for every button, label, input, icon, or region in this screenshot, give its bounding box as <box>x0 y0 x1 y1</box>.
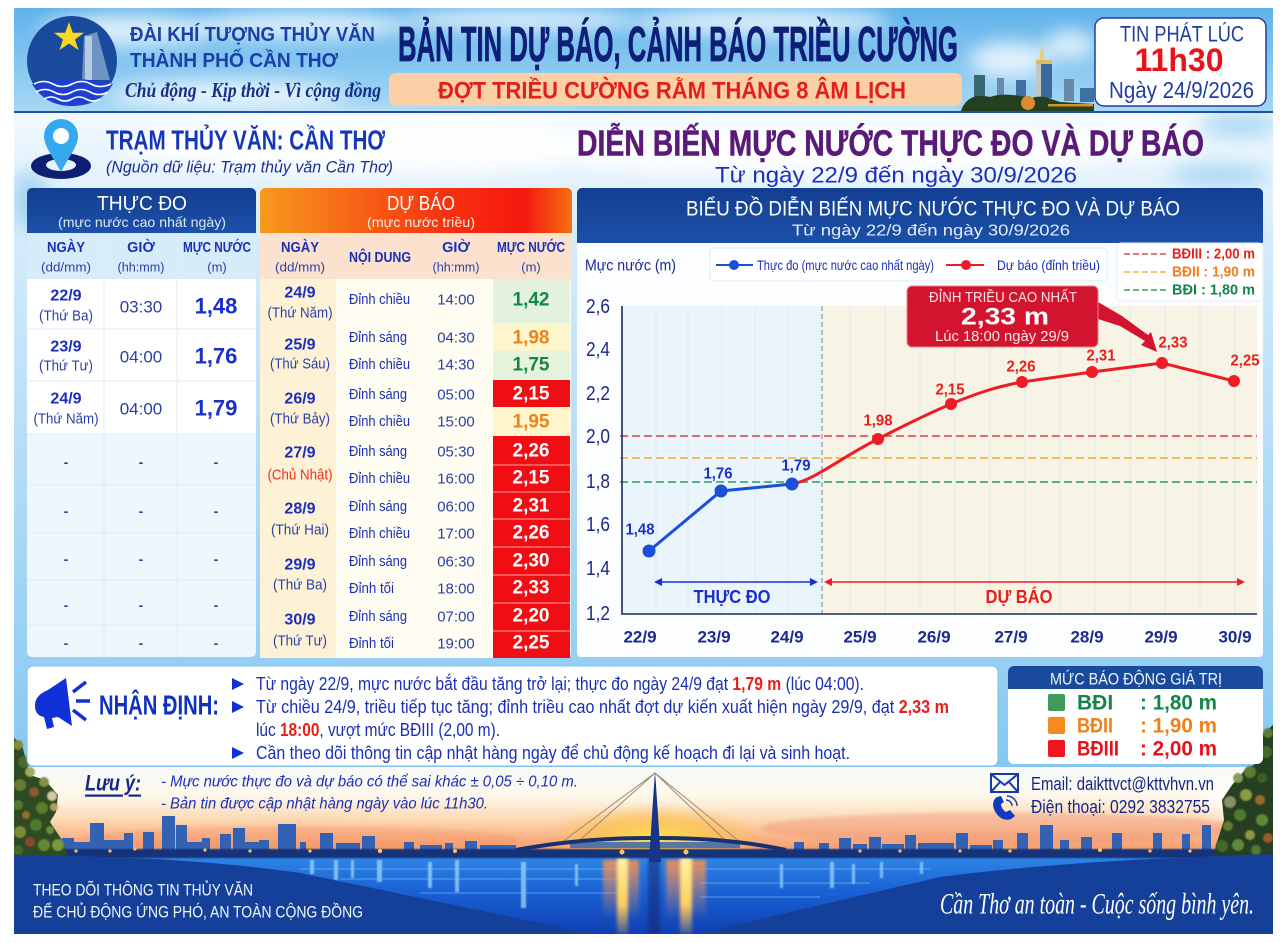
forecast rows <box>349 290 550 654</box>
issue time box: TIN PHÁT LÚC <box>1120 22 1244 46</box>
water <box>115 857 1192 934</box>
measured column headings: (hh:mm) <box>118 260 164 274</box>
forecast value cells <box>493 279 570 658</box>
panel: alert values: : 1,90 m <box>1140 714 1217 738</box>
series legend <box>710 248 1107 281</box>
forecast rows: Đỉnh chiều <box>349 471 410 487</box>
measured rows: (Thứ Năm) <box>34 410 99 428</box>
forecast rows: 1,98 <box>513 328 549 348</box>
arrow: forecast range <box>824 578 1245 607</box>
forecast rows: 2,20 <box>513 606 549 626</box>
panel: alert values: BĐI <box>1077 692 1113 714</box>
arrow: measured range: THỰC ĐO <box>694 587 770 607</box>
measured rows: - <box>139 454 144 470</box>
main body background <box>12 113 1280 767</box>
x-axis labels <box>623 628 1252 646</box>
forecast rows: 1,95 <box>513 412 550 432</box>
forecast rows: 06:00 <box>437 498 475 516</box>
forecast column headings: (m) <box>521 260 541 274</box>
city skyline <box>50 816 1230 858</box>
alert level legend: BĐIII : 2,00 m <box>1172 246 1255 262</box>
series legend: Thực đo (mực nước cao nhất ngày) <box>757 257 934 273</box>
footer message: ĐỂ CHỦ ĐỘNG ỨNG PHÓ, AN TOÀN CỘNG ĐỒNG <box>33 902 363 922</box>
y-axis labels: 2,4 <box>586 339 610 361</box>
measured rows: - <box>214 597 219 613</box>
measured rows: - <box>64 551 69 567</box>
forecast rows: 2,26 <box>513 522 549 544</box>
forecast column headings: MỰC NƯỚC <box>497 238 565 256</box>
forecast column headings: (hh:mm) <box>432 260 480 274</box>
measured rows: 24/9 <box>50 390 82 408</box>
left tree <box>13 738 68 856</box>
forecast table header: DỰ BÁO <box>387 192 455 215</box>
plot area <box>586 286 1260 646</box>
forecast rows: 17:00 <box>437 526 475 542</box>
forecast date labels: 30/9 <box>284 612 316 628</box>
measured rows: - <box>64 635 69 651</box>
measured rows: 04:00 <box>120 348 162 366</box>
alert level legend: BĐII : 1,90 m <box>1172 264 1255 280</box>
forecast rows: Đỉnh chiều <box>349 357 410 373</box>
forecast column headings: NGÀY <box>281 239 319 256</box>
panel: alert values: BĐIII <box>1077 738 1119 760</box>
agency name: Chủ động - Kịp thời - Vì cộng đồng <box>125 78 381 102</box>
alert lines <box>620 436 1257 482</box>
forecast column headings <box>260 233 571 279</box>
measured rows: - <box>214 503 219 519</box>
forecast column headings: (dd/mm) <box>275 260 325 274</box>
forecast date labels: 29/9 <box>284 556 316 574</box>
measured rows: - <box>214 551 219 567</box>
alert level legend: BĐI : 1,80 m <box>1172 282 1255 298</box>
forecast date labels: (Thứ Bảy) <box>270 410 330 428</box>
forecast column headings: GIỜ <box>442 238 470 256</box>
assessment text: Từ ngày 22/9, mực nước bắt đầu tăng trở lại; thực đo ngày 24/9 đạt 1,79 m (lúc 04:00). <box>256 673 864 694</box>
forecast rows: 1,75 <box>513 354 550 376</box>
forecast date labels: (Chủ Nhật) <box>268 466 333 484</box>
y-axis title: Mực nước (m) <box>585 258 676 274</box>
forecast rows: Đỉnh chiều <box>349 526 410 542</box>
forecast rows: 19:00 <box>437 636 475 652</box>
station name: TRẠM THỦY VĂN: CẦN THƠ <box>106 124 385 156</box>
panel: assessment <box>27 666 998 766</box>
contact text: Email: daikttvct@kttvhvn.vn <box>1031 774 1214 794</box>
notes: Lưu ý: <box>85 770 141 796</box>
footer message <box>33 880 363 922</box>
forecast rows: Đỉnh chiều <box>349 292 410 308</box>
right tree <box>1214 725 1273 856</box>
forecast rows: 14:00 <box>437 292 475 308</box>
agency name <box>125 22 381 102</box>
forecast rows: 2,15 <box>513 468 550 488</box>
forecast series: 1,98 <box>864 412 893 430</box>
forecast series <box>792 334 1260 484</box>
y-axis labels: 2,2 <box>586 383 610 405</box>
station name <box>106 124 393 176</box>
x-axis labels: 28/9 <box>1070 628 1104 646</box>
bullet markers <box>232 678 244 759</box>
y-axis labels <box>586 296 610 625</box>
measured rows: - <box>214 635 219 651</box>
forecast series: 2,15 <box>936 382 965 398</box>
x-axis labels: 26/9 <box>917 628 951 646</box>
measured rows: 22/9 <box>50 288 82 304</box>
forecast series: 2,25 <box>1230 352 1260 370</box>
measured series <box>626 458 811 558</box>
notes <box>85 770 578 812</box>
measured rows: - <box>139 597 144 613</box>
x-axis labels: 22/9 <box>623 628 657 646</box>
measured rows: (Thứ Ba) <box>39 308 93 324</box>
footer message: THEO DÕI THÔNG TIN THỦY VĂN <box>33 880 253 900</box>
measured rows: 03:30 <box>120 298 162 316</box>
forecast rows: Đỉnh tối <box>349 636 394 652</box>
y-axis labels: 1,8 <box>586 471 610 493</box>
x-axis labels: 24/9 <box>770 628 804 646</box>
notes: - Mực nước thực đo và dự báo có thể sai khác ± 0,05 ÷ 0,10 m. <box>161 772 578 790</box>
panel: measured table <box>27 188 256 657</box>
forecast rows: 16:00 <box>437 470 475 488</box>
measured rows: - <box>139 551 144 567</box>
forecast rows: 06:30 <box>437 554 475 570</box>
forecast date labels: 27/9 <box>284 444 316 462</box>
measured series: 1,76 <box>704 466 733 482</box>
subtitle banner: ĐỢT TRIỀU CƯỜNG RẰM THÁNG 8 ÂM LỊCH <box>438 76 906 104</box>
divider under header <box>14 111 1273 113</box>
forecast rows: 04:30 <box>437 330 475 346</box>
measured column headings: MỰC NƯỚC <box>183 238 251 256</box>
forecast series: 2,26 <box>1006 358 1036 376</box>
contact text <box>1031 774 1214 817</box>
measured rows: - <box>139 503 144 519</box>
forecast date labels <box>268 284 333 650</box>
chart header <box>577 188 1263 243</box>
forecast date labels: (Thứ Hai) <box>271 522 329 538</box>
chart header: Từ ngày 22/9 đến ngày 30/9/2026 <box>792 222 1070 240</box>
measured column headings: (m) <box>207 260 227 274</box>
forecast date labels: 26/9 <box>284 390 316 408</box>
measured column headings: NGÀY <box>47 239 85 256</box>
forecast rows: 2,25 <box>513 632 550 654</box>
notes: - Bản tin được cập nhật hàng ngày vào lúc 11h30. <box>161 796 488 812</box>
measured rows: - <box>139 635 144 651</box>
icon: phone <box>993 796 1017 820</box>
measured series: 1,48 <box>626 522 655 538</box>
arrow: measured range <box>654 578 818 607</box>
x-axis labels: 25/9 <box>843 628 877 646</box>
section title <box>577 122 1204 188</box>
axes <box>622 306 1257 614</box>
measured rows: 23/9 <box>50 338 82 356</box>
logo <box>27 16 117 106</box>
cable-stayed bridge <box>516 771 786 862</box>
forecast rows: Đỉnh sáng <box>349 609 407 625</box>
forecast date labels: 28/9 <box>284 500 316 518</box>
agency name: ĐÀI KHÍ TƯỢNG THỦY VĂN <box>130 22 375 46</box>
measured column headings: (dd/mm) <box>41 260 91 274</box>
y-axis labels: 1,4 <box>586 558 610 580</box>
forecast rows: Đỉnh sáng <box>349 554 407 570</box>
forecast column headings: NỘI DUNG <box>349 248 411 266</box>
forecast series: 2,31 <box>1086 348 1116 364</box>
measured rows <box>34 288 237 651</box>
assessment heading: NHẬN ĐỊNH: <box>99 690 219 720</box>
measured rows: 1,48 <box>195 294 237 318</box>
header skyline illustration <box>961 43 1094 111</box>
issue time box: 11h30 <box>1135 42 1223 78</box>
panel: alert values: : 1,80 m <box>1140 692 1217 714</box>
arrow: forecast range: DỰ BÁO <box>986 586 1052 607</box>
y-axis labels: 1,2 <box>586 603 610 625</box>
assessment text: lúc 18:00, vượt mức BĐIII (2,00 m). <box>256 720 500 740</box>
measured table header <box>27 188 256 233</box>
x-axis labels: 27/9 <box>994 628 1028 646</box>
measured rows: - <box>64 597 69 613</box>
measured rows: 04:00 <box>120 400 162 418</box>
forecast table header: (mực nước triều) <box>367 214 475 230</box>
forecast table header <box>260 188 572 233</box>
callout: highest tide: ĐỈNH TRIỀU CAO NHẤT <box>929 289 1077 306</box>
alert level legend <box>1117 243 1263 301</box>
forecast rows: Đỉnh sáng <box>349 387 407 403</box>
panel: alert values: : 2,00 m <box>1140 738 1217 760</box>
assessment text: Từ chiều 24/9, triều tiếp tục tăng; đỉnh triều cao nhất đợt dự kiến xuất hiện ngày 29/9, đạt 2,33 m <box>256 697 949 717</box>
y-axis labels: 2,0 <box>586 426 610 448</box>
forecast series: 2,33 <box>1158 334 1188 352</box>
forecast date labels: 24/9 <box>284 284 316 302</box>
icon: megaphone <box>35 678 90 729</box>
x-axis labels: 29/9 <box>1144 628 1178 646</box>
panel: alert values <box>1008 666 1263 764</box>
forecast date labels: (Thứ Năm) <box>268 304 333 322</box>
sunset sky <box>34 765 1244 850</box>
y-axis labels: 2,6 <box>586 296 610 318</box>
icon: envelope <box>991 774 1018 792</box>
y-axis labels: 1,6 <box>586 514 610 536</box>
measured rows: - <box>64 503 69 519</box>
forecast rows: Đỉnh chiều <box>349 414 410 430</box>
measured table header: (mực nước cao nhất ngày) <box>58 214 226 230</box>
callout: highest tide: Lúc 18:00 ngày 29/9 <box>935 329 1069 345</box>
panel: alert values: MỨC BÁO ĐỘNG GIÁ TRỊ <box>1050 670 1222 688</box>
assessment text: Cần theo dõi thông tin cập nhật hàng ngày để chủ động kế hoạch đi lại và sinh hoạt. <box>256 743 850 763</box>
measured rows: - <box>64 454 69 470</box>
measured series: 1,79 <box>782 458 811 474</box>
station name: (Nguồn dữ liệu: Trạm thủy văn Cần Thơ) <box>106 158 393 176</box>
measured table header: THỰC ĐO <box>97 193 187 215</box>
agency name: THÀNH PHỐ CẦN THƠ <box>130 48 339 72</box>
x-axis labels: 23/9 <box>697 628 731 646</box>
contact text: Điện thoại: 0292 3832755 <box>1031 797 1210 817</box>
forecast rows: Đỉnh sáng <box>349 444 407 460</box>
forecast rows: 2,33 <box>513 578 549 598</box>
measured column headings <box>27 233 256 279</box>
forecast rows: 15:00 <box>437 414 475 430</box>
callout: highest tide <box>907 286 1157 352</box>
callout: highest tide: 2,33 m <box>961 304 1049 330</box>
measured rows: - <box>214 454 219 470</box>
section title: Từ ngày 22/9 đến ngày 30/9/2026 <box>715 162 1077 188</box>
forecast date labels: (Thứ Sáu) <box>270 356 330 372</box>
panel: forecast table <box>260 188 572 658</box>
forecast rows: 07:00 <box>437 608 475 626</box>
issue time box: Ngày 24/9/2026 <box>1109 77 1254 103</box>
forecast date labels: (Thứ Tư) <box>273 632 327 650</box>
forecast rows: 18:00 <box>437 580 475 598</box>
measured rows: (Thứ Tư) <box>39 358 93 374</box>
forecast rows: 14:30 <box>437 356 475 374</box>
forecast rows: 2,26 <box>513 440 549 462</box>
forecast rows: 2,15 <box>513 384 550 404</box>
measured rows: 1,76 <box>195 344 237 368</box>
assessment text <box>256 673 949 763</box>
forecast rows: Đỉnh sáng <box>349 499 407 515</box>
forecast rows: 2,30 <box>513 550 549 572</box>
panel: alert values: BĐII <box>1077 714 1113 738</box>
icon: location pin <box>31 119 91 179</box>
forecast rows: Đỉnh tối <box>349 581 394 597</box>
x-axis labels: 30/9 <box>1218 628 1252 646</box>
forecast rows: 05:30 <box>437 444 475 460</box>
series legend: Dự báo (đỉnh triều) <box>997 257 1100 273</box>
chart header: BIỂU ĐỒ DIỄN BIẾN MỰC NƯỚC THỰC ĐO VÀ DỰ BÁO <box>686 196 1180 220</box>
forecast date labels: 25/9 <box>284 336 316 354</box>
forecast date labels: (Thứ Ba) <box>273 576 327 594</box>
forecast rows: 05:00 <box>437 386 475 404</box>
forecast rows: Đỉnh sáng <box>349 330 407 346</box>
issue time box <box>1095 18 1266 106</box>
measured rows: 1,79 <box>195 396 237 420</box>
header sky background <box>14 8 1273 112</box>
panel: chart <box>577 188 1263 657</box>
navy foreground shapes <box>14 854 1275 935</box>
forecast rows: 2,31 <box>513 496 550 516</box>
measured column headings: GIỜ <box>127 238 155 256</box>
forecast rows: 1,42 <box>513 290 549 310</box>
